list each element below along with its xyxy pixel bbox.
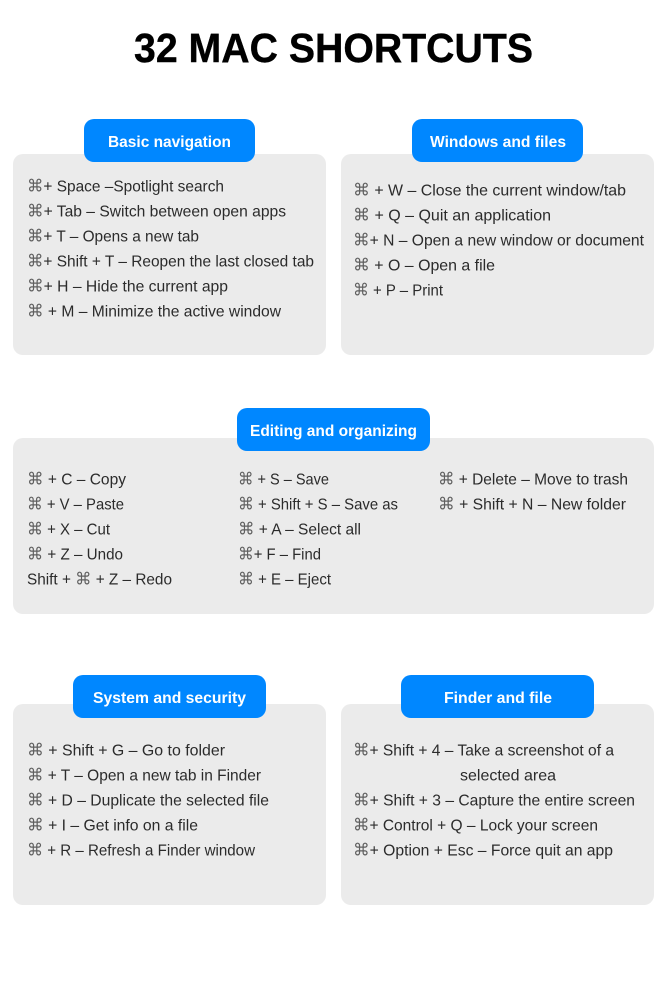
panel: basic navigation: ⌘+ Space –Spotlight search xyxy=(27,176,224,196)
panel: system and security: ⌘ + I – Get info on a file xyxy=(27,816,198,836)
panel: system and security: ⌘ + D – Duplicate the selected file xyxy=(27,790,269,810)
panel: editing and organizing: ⌘ + Shift + S – Save as xyxy=(238,494,398,514)
panel: editing and organizing: Shift + ⌘ + Z – Redo xyxy=(27,570,172,590)
panel: system and security: System and security xyxy=(93,690,246,707)
panel: editing and organizing: ⌘ + Shift + N – New folder xyxy=(438,494,627,514)
panel: system and security: ⌘ + R – Refresh a Finder window xyxy=(27,840,255,860)
panel: basic navigation: Basic navigation xyxy=(108,134,231,151)
panel: basic navigation: ⌘+ Shift + T – Reopen the last closed tab xyxy=(27,252,314,272)
panel: basic navigation: ⌘+ T – Opens a new tab xyxy=(27,226,199,246)
panel: finder and file: ⌘+ Shift + 4 – Take a screenshot of a xyxy=(353,740,614,760)
panel: windows and files: ⌘ + P – Print xyxy=(353,280,444,300)
panel: finder and file: Finder and file xyxy=(444,690,552,707)
panel: editing and organizing: ⌘ + V – Paste xyxy=(27,494,124,514)
panel: finder and file xyxy=(341,675,654,905)
panel: windows and files: ⌘ + Q – Quit an application xyxy=(353,206,551,226)
panel: windows and files: ⌘ + W – Close the current window/tab xyxy=(353,180,626,200)
panel: editing and organizing: ⌘ + S – Save xyxy=(238,470,329,490)
panel: finder and file: selected area xyxy=(460,768,556,784)
panel: editing and organizing: ⌘ + C – Copy xyxy=(27,470,126,490)
panel: editing and organizing: ⌘ + A – Select all xyxy=(238,520,361,540)
panel: system and security xyxy=(13,675,326,905)
panel: editing and organizing: ⌘ + Delete – Move to trash xyxy=(438,470,628,490)
panel: finder and file: ⌘+ Control + Q – Lock your screen xyxy=(353,816,598,836)
panel: basic navigation: ⌘ + M – Minimize the active window xyxy=(27,302,281,322)
panel: windows and files: ⌘ + O – Open a file xyxy=(353,256,495,276)
panel: editing and organizing: ⌘ + E – Eject xyxy=(238,570,332,590)
panel: editing and organizing: ⌘+ F – Find xyxy=(238,544,321,564)
panel: windows and files: Windows and files xyxy=(430,134,566,151)
panel: finder and file: ⌘+ Shift + 3 – Capture the entire screen xyxy=(353,790,635,810)
panel: editing and organizing: ⌘ + Z – Undo xyxy=(27,544,123,564)
panel: windows and files xyxy=(341,119,654,355)
panel: editing and organizing xyxy=(13,408,654,614)
panel: editing and organizing: Editing and organizing xyxy=(250,423,417,440)
panel: system and security: ⌘ + T – Open a new tab in Finder xyxy=(27,766,262,786)
panel: basic navigation: ⌘+ Tab – Switch between open apps xyxy=(27,202,286,222)
panel: editing and organizing: ⌘ + X – Cut xyxy=(27,520,111,540)
panel: finder and file: ⌘+ Option + Esc – Force quit an app xyxy=(353,840,613,860)
panel: basic navigation: ⌘+ H – Hide the current app xyxy=(27,276,228,296)
panel: basic navigation xyxy=(13,119,326,355)
panel: system and security: ⌘ + Shift + G – Go to folder xyxy=(27,740,226,760)
panel: windows and files: ⌘+ N – Open a new window or document xyxy=(353,230,645,250)
title: 32 MAC SHORTCUTS xyxy=(134,25,533,71)
